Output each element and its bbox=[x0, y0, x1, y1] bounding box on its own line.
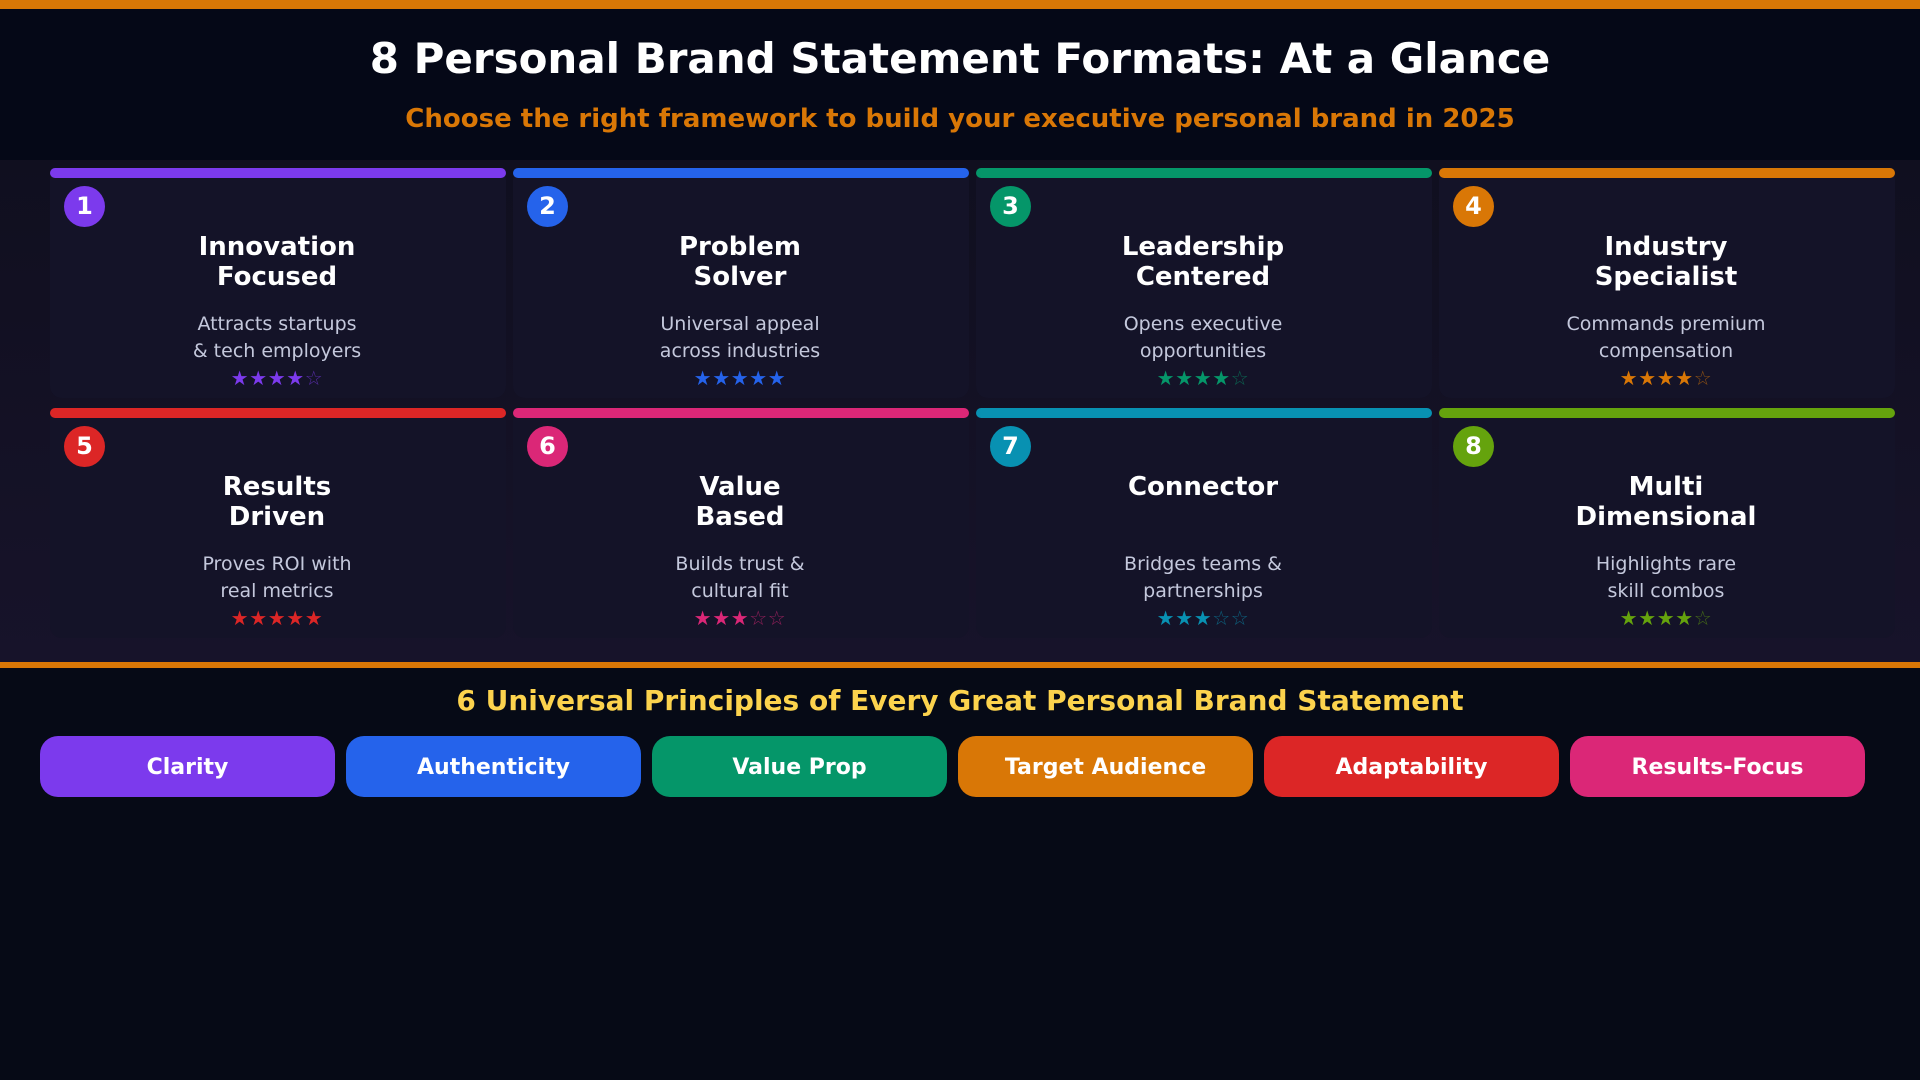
card 6: Value Based: Based bbox=[695, 502, 785, 532]
card 2: Problem Solver: Solver bbox=[694, 262, 786, 292]
pill: Adaptability: Adaptability bbox=[1336, 755, 1487, 780]
pill: Clarity bbox=[40, 736, 335, 797]
card 2: Problem Solver: Universal appeal bbox=[660, 313, 820, 335]
subtitle: Choose the right framework to build your executive personal brand in 2025 bbox=[405, 104, 1515, 134]
card 7: Connector bbox=[976, 408, 1432, 630]
card 5: Results Driven: Proves ROI with bbox=[202, 553, 352, 575]
card 4: Industry Specialist: Commands premium bbox=[1566, 313, 1766, 335]
top accent bar bbox=[0, 0, 1920, 9]
divider bar bbox=[0, 662, 1920, 668]
card 6: Value Based: Builds trust & bbox=[675, 553, 805, 575]
card 3: Leadership Centered: Leadership bbox=[1122, 232, 1284, 262]
card 3: Leadership Centered: 3 bbox=[1002, 192, 1019, 220]
card 1: Innovation Focused: ★★★★☆ bbox=[231, 366, 323, 390]
card 8: Multi Dimensional: Highlights rare bbox=[1596, 553, 1736, 575]
card 2: Problem Solver: across industries bbox=[660, 340, 820, 362]
card 6: Value Based: cultural fit bbox=[691, 580, 789, 602]
card 1: Innovation Focused: Innovation bbox=[199, 232, 355, 262]
card 5: Results Driven: real metrics bbox=[220, 580, 334, 602]
pill: Results-Focus: Results-Focus bbox=[1632, 755, 1803, 780]
card 4: Industry Specialist: 4 bbox=[1465, 192, 1482, 220]
card 5: Results Driven: 5 bbox=[76, 432, 93, 460]
card 1: Innovation Focused: Attracts startups bbox=[197, 313, 357, 335]
pill: Value Prop bbox=[652, 736, 947, 797]
card 6: Value Based: 6 bbox=[539, 432, 556, 460]
card 8: Multi Dimensional: skill combos bbox=[1608, 580, 1724, 602]
card 8: Multi Dimensional: Dimensional bbox=[1576, 502, 1756, 532]
card 8: Multi Dimensional: Multi bbox=[1629, 472, 1703, 502]
pill: Adaptability bbox=[1264, 736, 1559, 797]
header band bbox=[0, 0, 1920, 160]
card 8: Multi Dimensional: 8 bbox=[1465, 432, 1482, 460]
card 1: Innovation Focused: Focused bbox=[217, 262, 337, 292]
card 7: Connector: Connector bbox=[1128, 472, 1278, 502]
card 8: Multi Dimensional: ★★★★☆ bbox=[1620, 606, 1712, 630]
pill: Value Prop: Value Prop bbox=[732, 755, 867, 780]
card 5: Results Driven: Driven bbox=[229, 502, 325, 532]
card 4: Industry Specialist: Specialist bbox=[1595, 262, 1737, 292]
card 6: Value Based bbox=[513, 408, 969, 630]
pill: Clarity: Clarity bbox=[147, 755, 228, 780]
card 3: Leadership Centered: Opens executive bbox=[1124, 313, 1282, 335]
card 4: Industry Specialist bbox=[1439, 168, 1895, 390]
card 3: Leadership Centered bbox=[976, 168, 1432, 390]
card 4: Industry Specialist: ★★★★☆ bbox=[1620, 366, 1712, 390]
card 7: Connector: 7 bbox=[1002, 432, 1019, 460]
card 1: Innovation Focused: & tech employers bbox=[193, 340, 361, 362]
card 6: Value Based: ★★★☆☆ bbox=[694, 606, 786, 630]
card 7: Connector: Bridges teams & bbox=[1124, 553, 1282, 575]
card 3: Leadership Centered: Centered bbox=[1136, 262, 1270, 292]
card 2: Problem Solver: 2 bbox=[539, 192, 556, 220]
card 3: Leadership Centered: opportunities bbox=[1140, 340, 1266, 362]
card 4: Industry Specialist: Industry bbox=[1604, 232, 1727, 262]
pill: Target Audience bbox=[958, 736, 1253, 797]
card 7: Connector: partnerships bbox=[1143, 580, 1263, 602]
pill: Authenticity bbox=[346, 736, 641, 797]
card 2: Problem Solver: Problem bbox=[679, 232, 801, 262]
section heading: 6 Universal Principles of Every Great Personal Brand Statement bbox=[456, 684, 1464, 717]
pill: Authenticity: Authenticity bbox=[417, 755, 570, 780]
card 8: Multi Dimensional bbox=[1439, 408, 1895, 630]
card 5: Results Driven bbox=[50, 408, 506, 630]
card 5: Results Driven: Results bbox=[223, 472, 331, 502]
panel: card grid background bbox=[0, 160, 1920, 662]
pill: Target Audience: Target Audience bbox=[1005, 755, 1206, 780]
card 1: Innovation Focused bbox=[50, 168, 506, 390]
card 7: Connector: ★★★☆☆ bbox=[1157, 606, 1249, 630]
card 4: Industry Specialist: compensation bbox=[1599, 340, 1733, 362]
pill: Results-Focus bbox=[1570, 736, 1865, 797]
card 5: Results Driven: ★★★★★ bbox=[231, 606, 323, 630]
card 3: Leadership Centered: ★★★★☆ bbox=[1157, 366, 1249, 390]
card 6: Value Based: Value bbox=[699, 472, 781, 502]
card 1: Innovation Focused: 1 bbox=[76, 192, 93, 220]
title: 8 Personal Brand Statement Formats: At a Glance bbox=[370, 34, 1550, 83]
card 2: Problem Solver: ★★★★★ bbox=[694, 366, 786, 390]
card 2: Problem Solver bbox=[513, 168, 969, 390]
